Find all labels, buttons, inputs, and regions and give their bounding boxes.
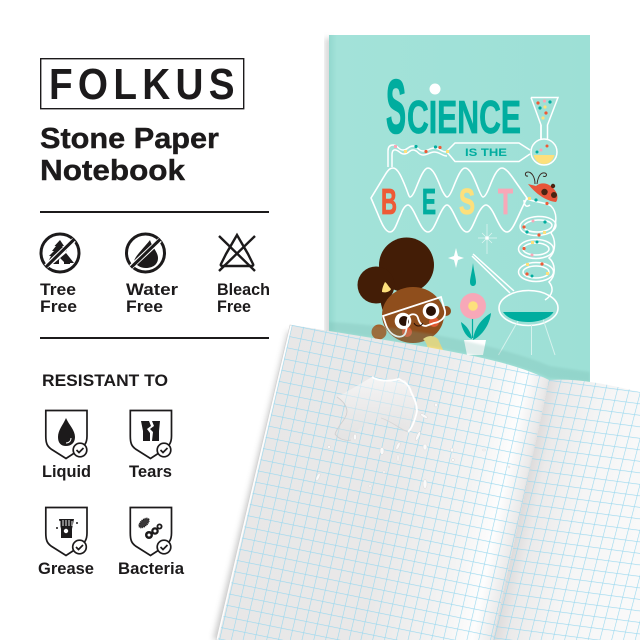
- product title: Stone Paper: [40, 123, 219, 155]
- resistant: liquid: [42, 410, 91, 481]
- feature: tree free: [40, 234, 79, 316]
- cover illustration: best waveform: [371, 168, 527, 232]
- water droplets: [315, 403, 510, 488]
- icon: teal drop: [470, 263, 476, 286]
- icon: shield with torn sheet: [130, 410, 172, 458]
- illustration: girl with goggles: [358, 238, 451, 352]
- cover text: best: T: [498, 181, 513, 222]
- brand logo: FOLKUS: [49, 59, 240, 109]
- page stack edge: [216, 325, 296, 640]
- label: Liquid: [42, 463, 91, 481]
- cover text: best: S: [459, 181, 475, 222]
- icon: shield with drop: [46, 410, 87, 458]
- icon: crossed water drop: [126, 234, 164, 272]
- label: [126, 281, 179, 316]
- label: [217, 281, 270, 316]
- left page: [210, 320, 560, 640]
- heading: resistant to: RESISTANT TO: [42, 371, 168, 390]
- label: Free: [40, 298, 77, 316]
- icon: shield with fries: [46, 508, 87, 556]
- notebook cover: [325, 35, 590, 385]
- label: Free: [217, 298, 251, 316]
- resistant: tears: [129, 410, 172, 481]
- label: Tree: [40, 281, 76, 299]
- icon: ladybug: [525, 172, 557, 202]
- label: Bacteria: [118, 560, 185, 578]
- cover illustration: coil and flask: [472, 198, 558, 355]
- coil beads: [522, 197, 549, 278]
- label: [40, 281, 77, 316]
- open notebook with graph paper: [210, 320, 640, 640]
- resistant: grease: [38, 508, 94, 578]
- feature: bleach free: [217, 235, 270, 316]
- cover title: science: S: [386, 65, 406, 150]
- label: Tears: [129, 463, 172, 481]
- page shadow: [213, 330, 300, 640]
- resistant: bacteria: [118, 508, 185, 578]
- cover text: best: E: [422, 181, 436, 222]
- cover text: best: B: [381, 181, 397, 222]
- flask contents: [394, 99, 554, 164]
- icon: sparkles: [448, 224, 497, 268]
- label: Water: [126, 281, 179, 299]
- label: Free: [126, 298, 163, 316]
- label: Grease: [38, 560, 94, 578]
- cover title: science: [386, 65, 521, 150]
- cover illustration: tubing and funnel: [388, 98, 558, 167]
- label: Bleach: [217, 281, 270, 299]
- feature: water free: [126, 234, 179, 316]
- water splash: [315, 377, 510, 488]
- right page: [493, 380, 640, 640]
- icon: shield with microbes: [130, 508, 172, 556]
- cover title: science: CIENCE: [407, 91, 521, 143]
- flask liquid: [503, 312, 554, 322]
- icon: flower in pot: [460, 293, 491, 355]
- icon: crossed tree: [41, 234, 79, 272]
- cover text: is the: IS THE: [465, 147, 507, 159]
- icon: crossed triangle: [219, 235, 255, 271]
- product title: Notebook: [40, 155, 185, 187]
- cover text: best: [381, 181, 513, 222]
- product title: [40, 123, 219, 187]
